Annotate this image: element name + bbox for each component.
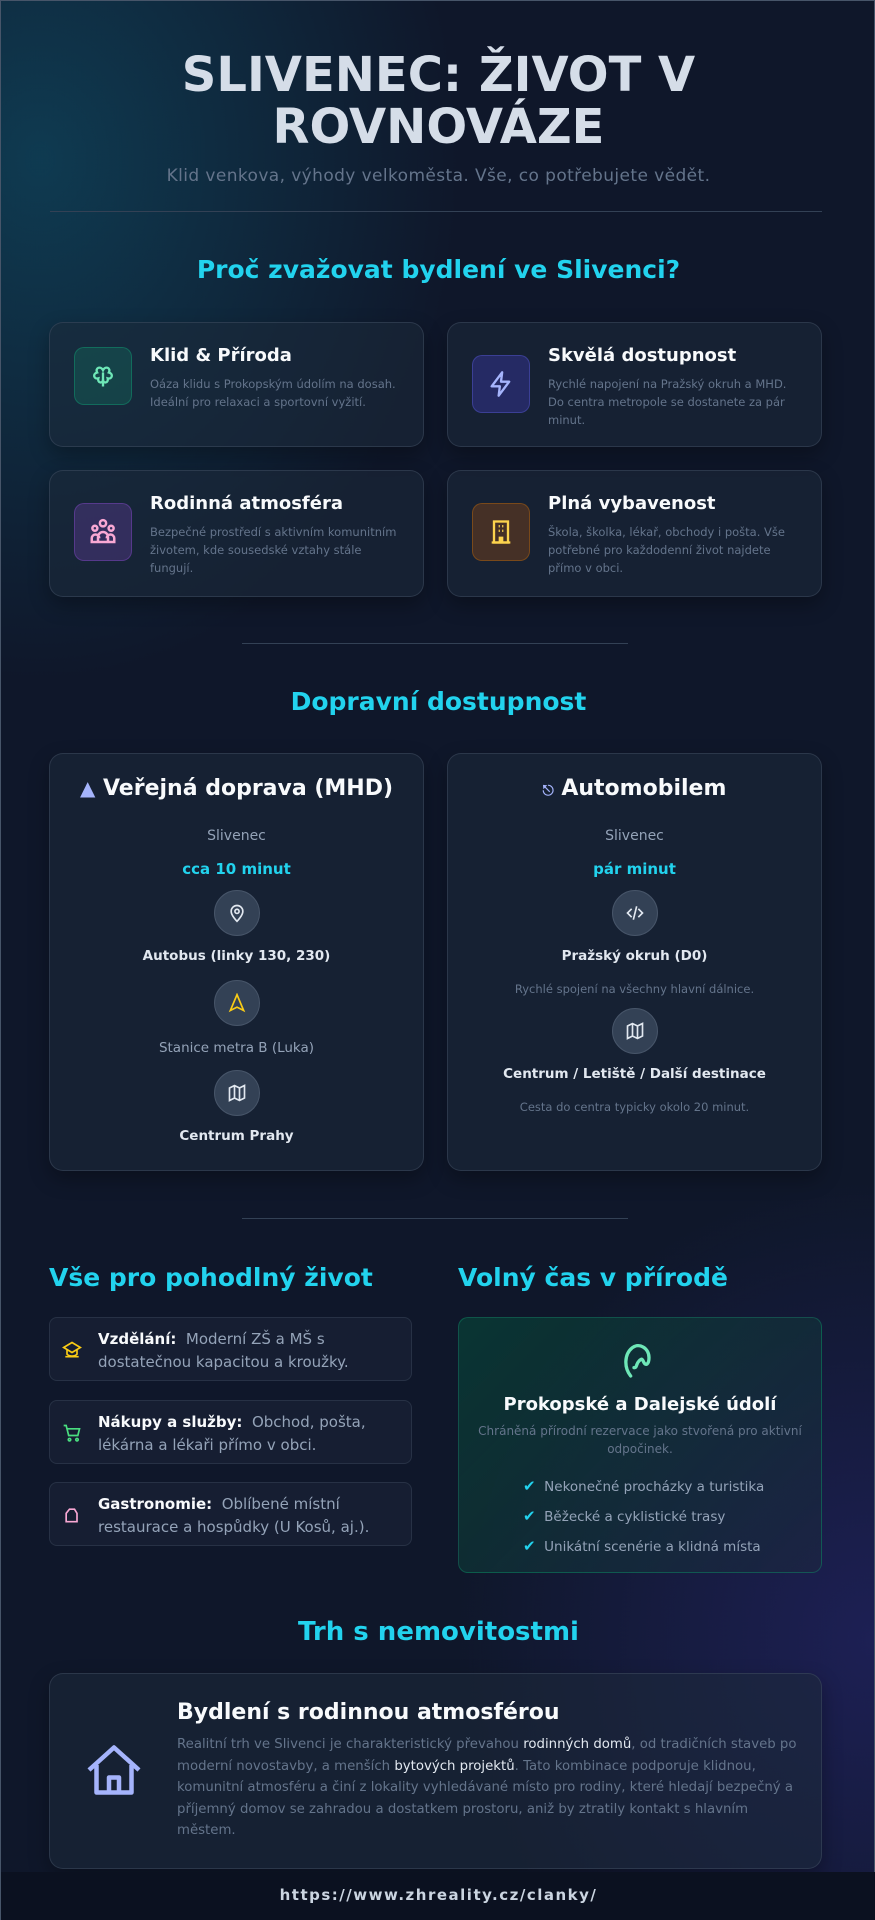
card: dostupnost: Rychlé napojení na Pražský okruh a MHD. Do centra metropole se dostanete za pár minut. (548, 377, 786, 427)
card: rodinna atmosfera: Bezpečné prostředí s aktivním komunitním životem, kde sousedské vztahy stále fungují. (150, 525, 396, 575)
item: education (49, 1317, 412, 1381)
checklist: ✔︎ Běžecké a cyklistické trasy (523, 1507, 725, 1525)
panel: auto: Slivenec (605, 828, 664, 844)
icon: building (472, 503, 530, 561)
heading: auto: ⎋ Automobilem (543, 776, 726, 801)
icon: gastro (65, 1508, 78, 1522)
item: education: Vzdělání: Moderní ZŠ a MŠ s dostatečnou kapacitou a kroužky. (98, 1330, 349, 1371)
panel: auto: pár minut (593, 860, 676, 878)
footer (1, 1872, 875, 1920)
icon: navigation (214, 980, 260, 1026)
panel: MHD: Slivenec (207, 828, 266, 844)
panel: MHD: cca 10 minut (182, 860, 291, 878)
panel: auto: Pražský okruh (D0) (562, 948, 707, 964)
heading: MHD: ▲ Veřejná doprava (MHD) (80, 776, 393, 801)
panel: market (49, 1673, 822, 1869)
checklist: ✔︎ Nekonečné procházky a turistika (523, 1477, 764, 1495)
panel: MHD: Autobus (linky 130, 230) (143, 948, 330, 964)
panel: MHD: Centrum Prahy (179, 1128, 294, 1144)
panel: nature: Chráněná přírodní rezervace jako stvořená pro aktivní odpočinek. (478, 1424, 802, 1456)
heading: nature: Volný čas v přírodě (458, 1263, 728, 1292)
icon: pin (214, 890, 260, 936)
panel: nature: Prokopské a Dalejské údolí (504, 1394, 776, 1415)
panel: auto: Rychlé spojení na všechny hlavní dálnice. (515, 982, 754, 996)
title: ROVNOVÁZE (273, 99, 604, 155)
checklist (523, 1477, 764, 1555)
card: vybavenost: Škola, školka, lékař, obchody i pošta. Vše potřebné pro každodenní život najdete přímo v obci. (548, 525, 785, 575)
panel: MHD: Stanice metra B (Luka) (159, 1040, 314, 1056)
footer: https://www.zhreality.cz/clanky/ (280, 1886, 597, 1904)
panel: market: Bydlení s rodinnou atmosférou (177, 1700, 560, 1725)
item: shopping: Nákupy a služby: Obchod, pošta, lékárna a lékaři přímo v obci. (98, 1413, 366, 1454)
item: shopping (49, 1400, 412, 1464)
panel: nature (458, 1317, 822, 1573)
item: gastro (49, 1482, 412, 1546)
icon: bolt (472, 355, 530, 413)
panel: auto: Centrum / Letiště / Další destinace (503, 1066, 766, 1082)
card: klid & priroda: Oáza klidu s Prokopským údolím na dosah. Ideální pro relaxaci a sportovní vyžití. (150, 377, 396, 409)
card: rodinna atmosfera: Rodinná atmosféra (150, 493, 343, 514)
icon: code (612, 890, 658, 936)
title: SLIVENEC: ŽIVOT V (182, 47, 695, 103)
icon: house (88, 1745, 140, 1795)
subtitle: Klid venkova, výhody velkoměsta. Vše, co potřebujete vědět. (167, 166, 710, 186)
card: vybavenost: Plná vybavenost (548, 493, 716, 514)
card: dostupnost: Skvělá dostupnost (548, 345, 736, 366)
icon: school (62, 1342, 82, 1358)
icon: nature (624, 1344, 651, 1378)
card: vybavenost (447, 470, 822, 597)
heading: why: Proč zvažovat bydlení ve Slivenci? (197, 255, 680, 284)
card: klid & priroda (49, 322, 424, 447)
icon: plant (74, 347, 132, 405)
card: dostupnost (447, 322, 822, 447)
icon: map (214, 1070, 260, 1116)
card: rodinna atmosfera (49, 470, 424, 597)
panel: auto (447, 753, 822, 1171)
panel: market: Realitní trh ve Slivenci je charakteristický převahou rodinných domů, od tradičních staveb po moderní novostavby, a menších bytových projektů. Tato kombinace podporuje klidnou, komunitní atmosféru a činí z lokality vyhledávané místo pro rodiny, které hledají bezpečný a příjemný domov se zahradou a dostatkem prostoru, aniž by ztratily kontakt s hlavním městem. (177, 1737, 796, 1838)
heading: transport: Dopravní dostupnost (291, 687, 586, 716)
heading: services: Vše pro pohodlný život (49, 1263, 373, 1292)
panel: MHD (49, 753, 424, 1171)
item: gastro: Gastronomie: Oblíbené místní restaurace a hospůdky (U Kosů, aj.). (98, 1495, 369, 1536)
checklist: ✔︎ Unikátní scenérie a klidná místa (523, 1537, 761, 1555)
title (182, 46, 695, 155)
heading: market: Trh s nemovitostmi (298, 1617, 579, 1647)
icon: cart (64, 1424, 80, 1442)
icon: map (612, 1008, 658, 1054)
panel: auto: Cesta do centra typicky okolo 20 minut. (520, 1100, 749, 1114)
icon: people (74, 503, 132, 561)
card: klid & priroda: Klid & Příroda (150, 345, 292, 366)
